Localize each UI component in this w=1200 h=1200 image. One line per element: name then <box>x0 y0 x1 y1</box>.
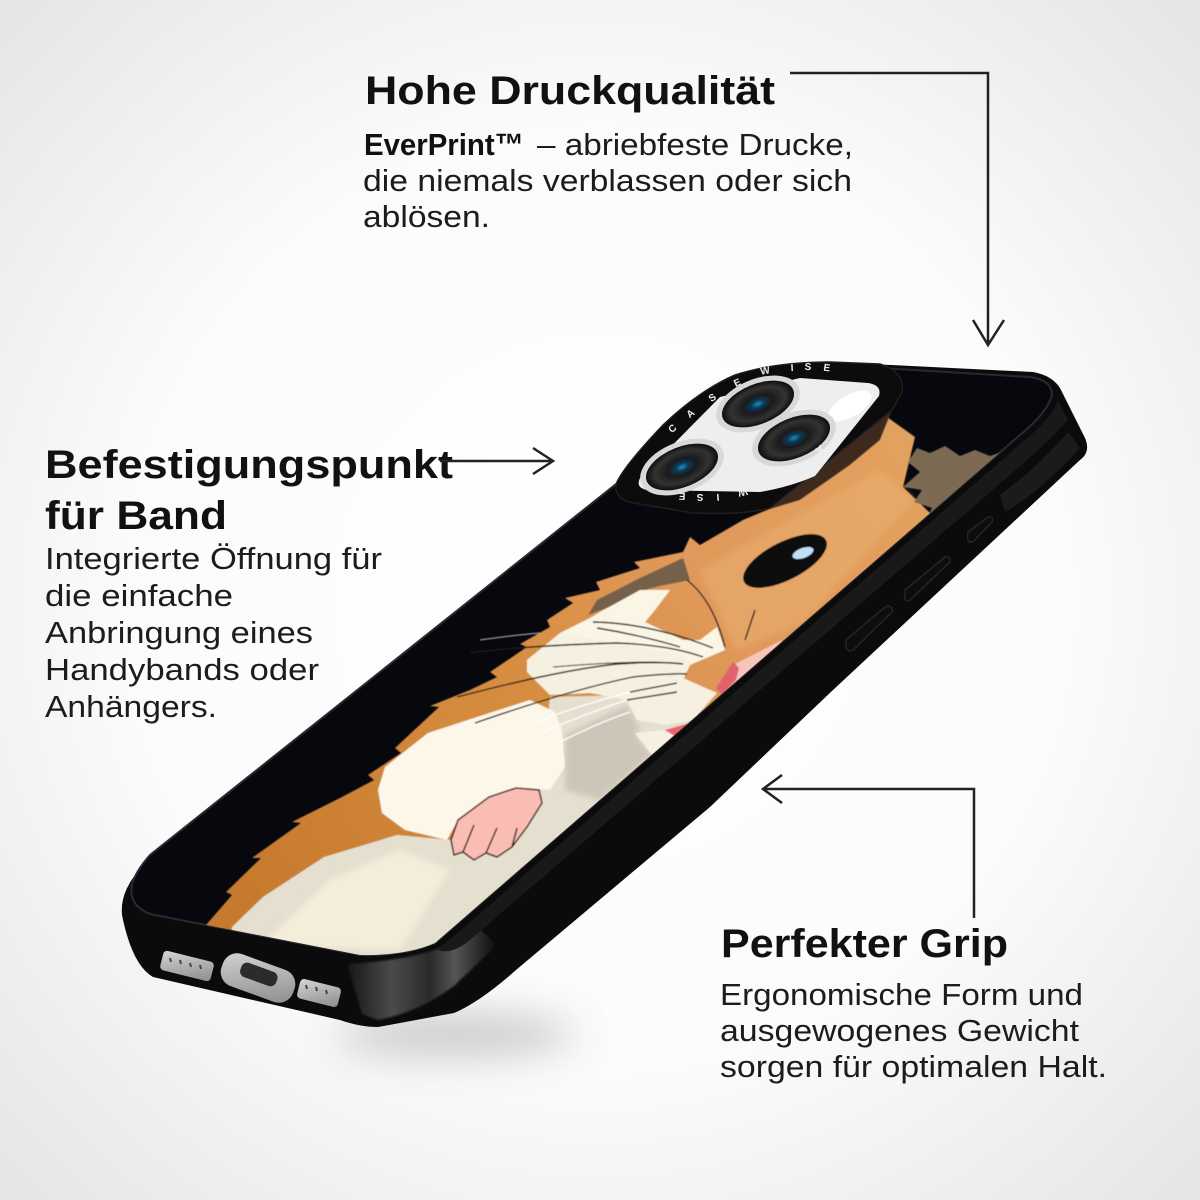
description: Handybands oder <box>45 652 319 687</box>
callout: Perfekter Grip <box>720 922 1107 1084</box>
heading <box>45 443 453 538</box>
callout: Befestigungspunkt <box>45 443 453 724</box>
face light fur <box>700 470 915 650</box>
brand ring text: A <box>685 408 697 421</box>
orange body fur <box>206 418 930 930</box>
belly <box>231 695 698 956</box>
left speaker <box>159 950 215 982</box>
brand ring text: E <box>764 477 775 490</box>
upper corner side <box>1000 432 1080 512</box>
description <box>720 977 1107 1084</box>
brand ring text: C <box>667 423 679 436</box>
description: – abriebfeste Drucke, <box>537 127 853 162</box>
action button <box>968 517 992 542</box>
description: sorgen für optimalen Halt. <box>720 1049 1107 1084</box>
paw <box>451 788 542 860</box>
brand ring text: W <box>736 485 748 498</box>
pink paw pad <box>451 788 542 860</box>
description: Ergonomische Form und <box>720 977 1083 1012</box>
screen back panel <box>131 368 1052 955</box>
nostril <box>716 662 739 695</box>
hamster artwork <box>206 410 1040 970</box>
description: Anbringung eines <box>45 615 313 650</box>
lens left <box>632 427 732 507</box>
phone shadow <box>335 1013 575 1057</box>
brand ring text: W <box>760 365 771 378</box>
cheek <box>527 633 717 725</box>
bottom ports <box>159 949 342 1008</box>
description: EverPrint™ <box>364 127 524 162</box>
brand ring text: S <box>707 392 719 405</box>
flash <box>824 384 876 428</box>
arrow: grip <box>763 775 974 918</box>
eye ball <box>742 533 828 588</box>
chin <box>635 730 674 754</box>
USB-C port <box>216 949 300 1007</box>
camera window <box>639 378 880 492</box>
heading: für Band <box>45 494 227 538</box>
brand ring text: I <box>716 491 720 502</box>
upper cream head patch <box>560 590 725 680</box>
camera island <box>616 362 902 513</box>
eye <box>742 533 828 588</box>
description: Anhängers. <box>45 689 217 724</box>
dark fur under camera <box>767 410 892 510</box>
whiskers <box>457 580 755 742</box>
volume down <box>846 606 892 651</box>
brand ring text: S <box>793 460 805 473</box>
case body <box>122 362 1087 1027</box>
brand ring text: C <box>834 424 847 437</box>
description: die einfache <box>45 578 233 613</box>
lens right <box>744 398 844 478</box>
brown-grey neck patch <box>903 446 1000 514</box>
brand ring text: I <box>790 363 794 374</box>
callout: Hohe Druckqualität <box>363 69 853 234</box>
brand ring text: E <box>678 490 686 501</box>
case corner highlight <box>347 925 497 1020</box>
brand ring text: S <box>696 491 703 502</box>
belly lower light <box>262 850 450 950</box>
brown head stripe <box>588 558 690 615</box>
paw toes <box>463 825 517 853</box>
heading: Befestigungspunkt <box>45 443 453 487</box>
brand ring text: E <box>823 363 831 374</box>
arrow: print quality <box>790 73 1004 345</box>
description: ablösen. <box>363 199 490 234</box>
description: die niemals verblassen oder sich <box>363 163 852 198</box>
heading: Perfekter Grip <box>721 922 1008 966</box>
arm <box>378 700 565 840</box>
heading: Hohe Druckqualität <box>365 69 775 113</box>
island frame <box>616 362 902 513</box>
brand ring text <box>667 362 847 502</box>
lens top <box>708 364 808 444</box>
arrow: strap point <box>440 448 553 474</box>
right speaker <box>296 978 342 1008</box>
tongue <box>665 722 688 736</box>
volume up <box>905 557 950 601</box>
belly dark shade <box>565 705 652 800</box>
description: ausgewogenes Gewicht <box>720 1013 1079 1048</box>
brand ring text: A <box>813 442 825 455</box>
nose <box>716 640 782 695</box>
eye shine <box>792 546 814 560</box>
brand ring text: S <box>804 362 812 373</box>
pink muzzle <box>726 640 782 690</box>
phone case <box>122 362 1087 1027</box>
case inner bevel <box>438 400 1068 951</box>
description <box>45 541 382 724</box>
side buttons <box>846 517 992 651</box>
brand ring text: E <box>732 377 743 390</box>
description <box>363 127 853 234</box>
description: Integrierte Öffnung für <box>45 541 382 576</box>
